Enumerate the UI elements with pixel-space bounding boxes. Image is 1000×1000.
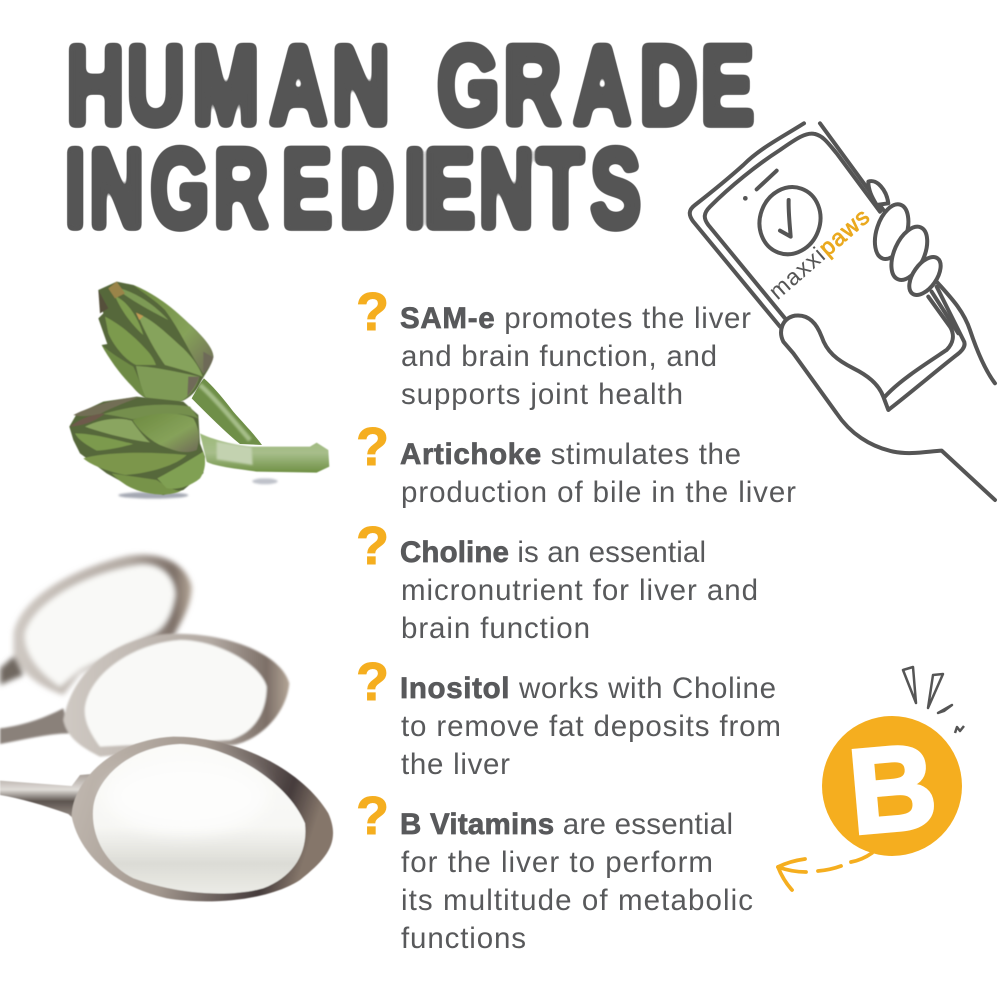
text block: Inositol xyxy=(356,652,781,781)
question mark icon: ? xyxy=(356,417,389,477)
back spoon xyxy=(0,555,192,695)
text block: Artichoke: production of bile in the liver xyxy=(401,476,796,509)
text block: Inositol: Inositol works with Choline xyxy=(400,672,776,705)
title: HUMANGRADE xyxy=(66,23,754,148)
title xyxy=(65,23,754,252)
text block: SAM-e xyxy=(356,282,751,411)
text block: Inositol: to remove fat deposits from xyxy=(401,710,781,743)
letter B: B xyxy=(844,719,942,860)
thumb and hand xyxy=(781,315,995,500)
phone speaker and camera xyxy=(743,171,777,201)
question mark icon: ? xyxy=(356,786,389,846)
fingers xyxy=(868,181,947,300)
text block: SAM-e: supports joint health xyxy=(401,378,683,411)
title: INGREDIENTS xyxy=(65,126,641,252)
text block: Choline: micronutrient for liver and xyxy=(401,574,758,607)
middle spoon xyxy=(0,634,289,757)
text block: B Vitamins: its multitude of metabolic xyxy=(401,884,753,917)
wrist xyxy=(937,282,995,383)
photo: artichokes xyxy=(69,282,329,499)
question mark icon: ? xyxy=(356,652,389,712)
text block: SAM-e: and brain function, and xyxy=(401,340,717,373)
phone body xyxy=(690,123,965,410)
text block: B Vitamins xyxy=(356,786,753,955)
dashed arrow xyxy=(778,853,872,890)
text block: SAM-e: SAM-e promotes the liver xyxy=(400,302,751,335)
text block: B Vitamins: for the liver to perform xyxy=(401,846,713,879)
lower stem xyxy=(200,433,329,473)
text block: Artichoke xyxy=(356,417,796,509)
upper stem xyxy=(192,378,262,445)
icon: vitamin B badge xyxy=(778,667,964,890)
text block: Inositol: the liver xyxy=(401,748,510,781)
lower artichoke xyxy=(69,397,205,495)
upper artichoke xyxy=(98,282,213,405)
icon: check mark in circle xyxy=(750,178,830,263)
text block: B Vitamins: B Vitamins are essential xyxy=(400,808,733,841)
question mark icon: ? xyxy=(356,516,389,576)
front spoon xyxy=(0,737,333,901)
artichoke shadows xyxy=(118,478,278,499)
text block: Choline xyxy=(356,516,758,645)
logo: maxxipaws: maxxipaws xyxy=(764,203,874,304)
photo: spoons with powder xyxy=(0,555,333,901)
illustration: hand holding phone xyxy=(690,123,995,500)
text block: Choline: Choline is an essential xyxy=(400,536,706,569)
orange circle xyxy=(822,716,962,856)
text block: B Vitamins: functions xyxy=(401,922,526,955)
text block: Artichoke: Artichoke stimulates the xyxy=(400,438,741,471)
question mark icon: ? xyxy=(356,282,389,342)
spark lines xyxy=(903,667,964,733)
text block: Choline: brain function xyxy=(401,612,590,645)
